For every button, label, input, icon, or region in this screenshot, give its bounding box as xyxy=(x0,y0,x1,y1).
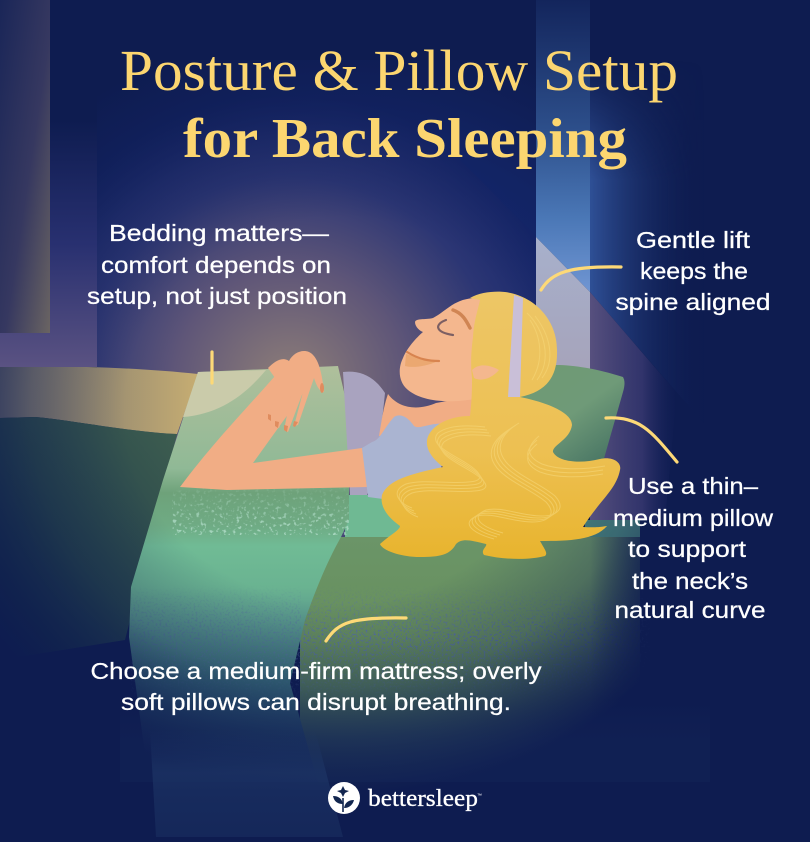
logo wordmark: bettersleep xyxy=(368,786,478,812)
hair shape xyxy=(380,292,620,559)
blanket xyxy=(129,366,349,748)
upper beam shadow xyxy=(440,60,537,237)
textured window glow xyxy=(590,76,665,378)
blanket body xyxy=(129,366,349,790)
pinky nail xyxy=(320,383,324,393)
gentle lift text: Gentle lift xyxy=(636,227,751,253)
headband xyxy=(508,295,523,397)
arm and hand xyxy=(180,351,368,490)
gentle lift pointer xyxy=(541,267,621,290)
teal sheet edge xyxy=(585,520,640,537)
pillow text: Use a thin– xyxy=(628,473,758,499)
blanket lower speckle xyxy=(131,598,301,688)
gentle lift text: keeps the xyxy=(640,258,748,284)
cheek lip shade xyxy=(405,354,438,367)
mattress text: Choose a medium-firm mattress; overly xyxy=(90,658,542,684)
callout: mattress xyxy=(90,618,542,715)
purple beam xyxy=(590,292,677,520)
logo icon xyxy=(328,782,360,814)
blanket fold highlight xyxy=(183,370,266,417)
callout: pillow xyxy=(606,418,773,623)
bedding pointer xyxy=(210,352,214,383)
callout: gentle lift xyxy=(541,227,770,315)
eyebrow xyxy=(453,310,470,328)
right window xyxy=(536,0,665,520)
right mattress fade xyxy=(590,537,660,797)
hair xyxy=(380,292,620,559)
mattress text: soft pillows can disrupt breathing. xyxy=(121,689,511,715)
bedding text: comfort depends on xyxy=(101,252,331,278)
mattress body xyxy=(300,537,640,790)
mattress pointer xyxy=(326,618,406,641)
mattress speckle xyxy=(300,592,625,693)
left wall frame xyxy=(0,120,97,367)
pillow text: natural curve xyxy=(614,597,766,623)
lit wedge xyxy=(536,237,590,372)
finger nails xyxy=(268,414,298,432)
mattress xyxy=(300,495,640,766)
khaki blanket far xyxy=(0,366,198,434)
gentle lift text: spine aligned xyxy=(616,289,770,315)
title xyxy=(120,38,678,170)
title line 2: for Back Sleeping xyxy=(183,108,627,170)
window column xyxy=(536,0,590,292)
sleeve xyxy=(343,372,385,495)
logo xyxy=(328,782,482,814)
ear xyxy=(472,365,499,380)
pillow text: to support xyxy=(628,536,747,562)
face xyxy=(400,298,495,401)
callout: bedding xyxy=(87,220,347,383)
lower blanket trace xyxy=(150,730,343,837)
arm xyxy=(180,368,368,490)
left window panel xyxy=(0,0,50,333)
neck and shoulder xyxy=(379,394,480,436)
title line 1: Posture & Pillow Setup xyxy=(120,38,678,103)
pillow pointer xyxy=(606,418,677,462)
eyelid xyxy=(438,320,453,335)
hair strands xyxy=(397,313,605,539)
pillow xyxy=(480,365,624,470)
head skin xyxy=(400,298,495,401)
trademark: ™ xyxy=(477,793,482,799)
bedding text: Bedding matters— xyxy=(109,220,329,246)
room scene xyxy=(0,60,537,660)
pillow text: the neck’s xyxy=(632,568,748,594)
floor band xyxy=(120,700,710,782)
blanket upper speckle xyxy=(172,488,349,535)
wall glow xyxy=(97,60,537,560)
mint sheet xyxy=(345,495,435,537)
hand xyxy=(268,351,324,432)
pillow text: medium pillow xyxy=(613,505,773,531)
lips xyxy=(407,352,439,361)
dark green bedding xyxy=(0,417,177,660)
shirt ruffle xyxy=(362,415,446,500)
bedding text: setup, not just position xyxy=(87,283,347,309)
